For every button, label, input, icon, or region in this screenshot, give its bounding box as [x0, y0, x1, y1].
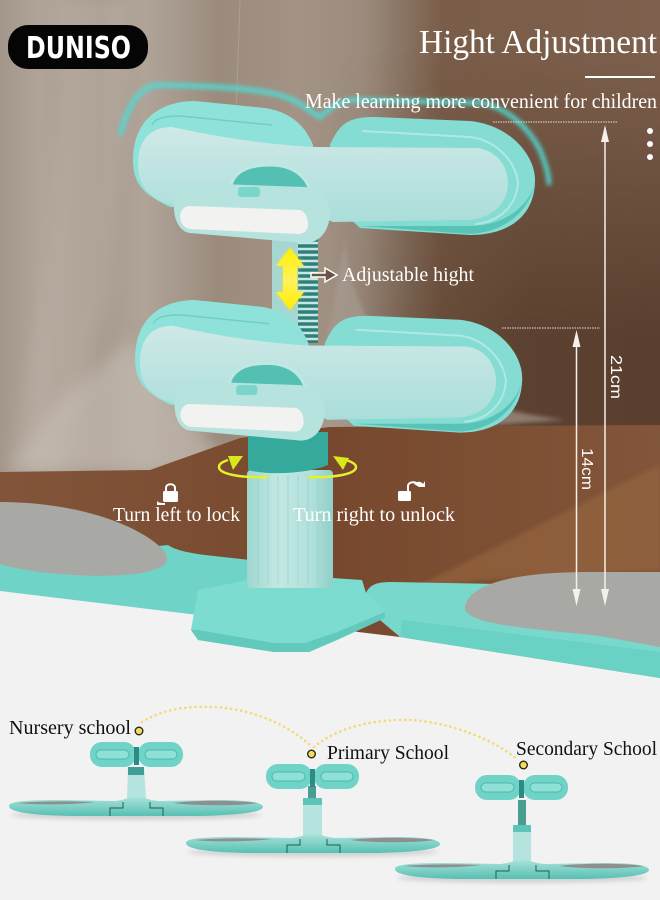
stage 3: secondary device [395, 775, 649, 883]
outline arrow [311, 268, 337, 282]
logo: DUNISO [26, 31, 131, 66]
marker dots [135, 727, 527, 769]
21cm dimension arrow: 21cm [607, 355, 624, 399]
icon: open lock [398, 481, 425, 501]
nursery label: Nursery school [9, 717, 131, 739]
primary label: Primary School [327, 742, 449, 764]
teal motion glow [120, 85, 549, 185]
adjustable height label: Adjustable hight [342, 264, 474, 286]
right tray [366, 582, 660, 678]
yellow double arrow [276, 248, 304, 310]
left tray [0, 545, 250, 615]
lower seat position [135, 300, 522, 441]
floor plank highlight [410, 465, 660, 590]
right rotation arrow [308, 456, 356, 477]
right tray lower edge [400, 620, 660, 678]
three dots [647, 128, 653, 160]
logo [8, 25, 148, 69]
background: curtain and wall [0, 0, 660, 480]
21cm dimension arrow [601, 125, 624, 606]
white lower area [0, 590, 660, 900]
ribbed column [247, 470, 333, 588]
14cm dimension arrow: 14cm [578, 448, 595, 490]
upper seat position [133, 101, 535, 243]
turn left label: Turn left to lock [113, 504, 240, 526]
right mat [465, 572, 660, 647]
left rotation arrow [219, 456, 268, 477]
main product: base and trays [0, 432, 660, 678]
dotted guide line bottom [502, 327, 600, 329]
stage 2: primary device [186, 764, 440, 857]
dotted path between stages [142, 707, 518, 760]
secondary label: Secondary School [516, 738, 657, 760]
title underline [585, 76, 655, 78]
dotted guide line top [493, 121, 618, 123]
title: Hight Adjustment [419, 24, 658, 61]
spring [272, 238, 318, 343]
stage 1: nursery device [9, 742, 263, 820]
rotation arrows [219, 456, 356, 477]
column collar [248, 432, 328, 473]
turn right label: Turn right to unlock [293, 504, 455, 526]
14cm dimension arrow [572, 330, 595, 606]
pedestal base [191, 578, 385, 652]
icon: closed lock [157, 484, 178, 505]
left mat [0, 502, 167, 576]
wood floor [0, 425, 660, 690]
